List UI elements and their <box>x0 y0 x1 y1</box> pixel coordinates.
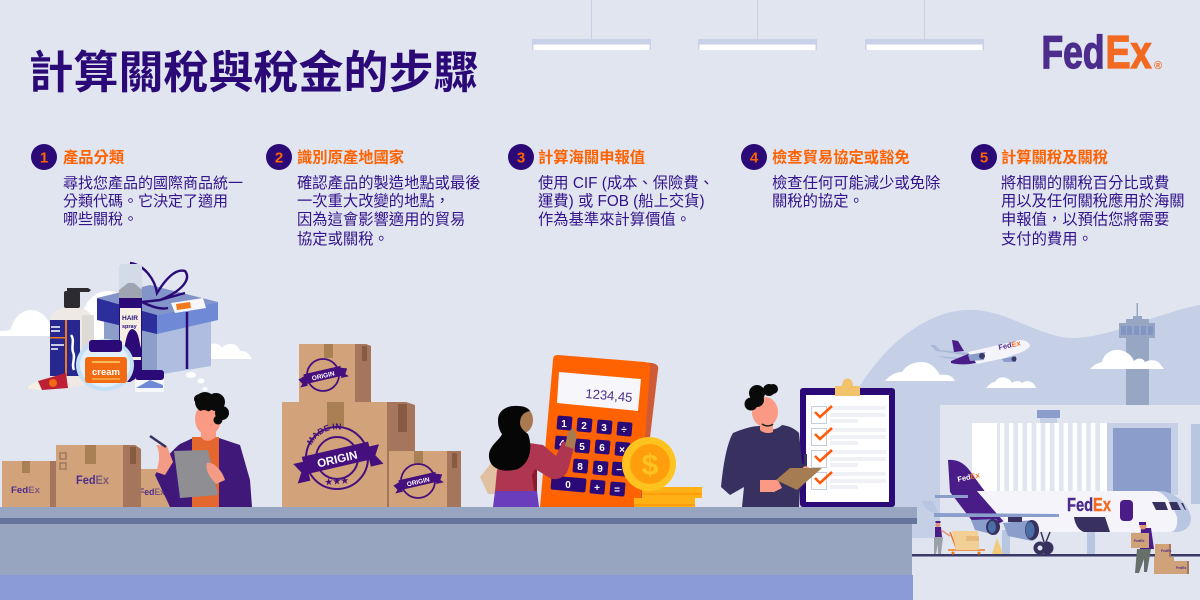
hair spray: HAIR <box>122 315 138 322</box>
hair spray <box>119 264 142 382</box>
step 1 <box>31 144 243 228</box>
small box: ORIGIN <box>406 476 431 488</box>
pump bottle <box>50 288 94 387</box>
wing pod <box>1008 517 1022 522</box>
step 1: 1 <box>40 150 48 166</box>
step 2: 2 <box>275 150 283 166</box>
step 2: 確認產品的製造地點或最後 <box>297 175 481 192</box>
stabiliser <box>922 501 938 513</box>
coins <box>622 437 702 509</box>
keys: 1 <box>561 419 567 430</box>
step 2: 識別原產地國家 <box>297 148 404 166</box>
coins: $ <box>642 449 659 482</box>
big box: ORIGIN <box>316 450 359 470</box>
step 3 <box>508 144 714 228</box>
FedEx logo <box>1042 26 1162 78</box>
keys: ÷ <box>621 425 627 436</box>
terminal windows <box>972 423 1200 504</box>
keys: 3 <box>601 423 607 434</box>
step 5: 5 <box>980 150 988 166</box>
support columns <box>1002 530 1095 554</box>
step 5: 用以及任何關稅應用於海關 <box>1001 192 1185 210</box>
gift box <box>97 263 218 375</box>
boxes with FedEx logos: FedEx <box>139 487 165 497</box>
big box: MADE IN <box>306 423 341 445</box>
step 3: 作為基準來計算價值。 <box>538 212 691 228</box>
logo on fuselage: FedEx <box>1067 494 1112 515</box>
cream jar <box>76 339 134 391</box>
step 5: 將相關的關稅百分比或費 <box>1001 175 1169 192</box>
courier with boxes: FedEx <box>1161 549 1172 553</box>
cargo plane <box>922 460 1191 554</box>
lower left band <box>912 538 942 555</box>
display <box>557 372 641 411</box>
step 1: 尋找您產品的國際商品統一 <box>63 175 243 192</box>
keys: 0 <box>565 480 571 491</box>
ground line <box>912 554 1200 556</box>
step 4: 檢查任何可能減少或免除 <box>772 175 940 192</box>
keys: 4 <box>559 439 565 450</box>
calculator <box>540 355 658 507</box>
origin boxes <box>282 344 461 507</box>
top box: ORIGIN <box>311 370 336 382</box>
terminal building <box>940 405 1200 555</box>
hills background <box>838 305 1200 540</box>
keys: 9 <box>597 464 603 475</box>
flying plane <box>930 338 1030 364</box>
thought bubbles <box>186 372 208 391</box>
calculator: 1234,45 <box>585 386 633 405</box>
keys: 2 <box>581 421 587 432</box>
step 2: 因為這會影響適用的貿易 <box>297 210 465 228</box>
thought cloud: products <box>0 263 252 392</box>
step 1: 產品分類 <box>63 148 125 166</box>
step 3: 3 <box>517 150 525 166</box>
hair spray: spray <box>122 324 138 330</box>
tail <box>948 460 1006 530</box>
step 4: 檢查貿易協定或豁免 <box>772 148 910 166</box>
boxes with FedEx logos: FedEx <box>76 475 110 487</box>
keys <box>550 415 633 497</box>
keys: 8 <box>577 462 583 473</box>
tube <box>28 373 68 390</box>
clouds <box>885 350 1164 388</box>
FedEx logo: ® <box>1154 60 1162 72</box>
counter <box>0 507 917 600</box>
keys: = <box>614 485 620 496</box>
step 5: 支付的費用。 <box>1001 231 1093 248</box>
cream jar: cream <box>92 367 120 378</box>
big box: ★★★ <box>324 476 349 487</box>
courier with boxes <box>1131 522 1189 574</box>
cargo plane: FedEx <box>957 470 981 484</box>
baggage worker <box>934 521 985 554</box>
step 4: 4 <box>750 150 759 166</box>
step 4 <box>741 144 940 210</box>
step 3: 使用 CIF (成本、保險費、 <box>538 175 714 192</box>
FedEx logo: Ex <box>1106 26 1152 78</box>
keys: × <box>619 445 625 456</box>
keys: − <box>616 465 622 476</box>
step 3: 計算海關申報值 <box>538 148 645 166</box>
courier with boxes: FedEx <box>1134 539 1145 543</box>
step 5 <box>971 144 1185 248</box>
step 2: 協定或關稅。 <box>297 231 389 248</box>
small jar <box>135 370 164 392</box>
FedEx logo: Fed <box>1042 26 1104 78</box>
person with tablet <box>150 392 252 507</box>
step 5: 計算關稅及關稅 <box>1001 148 1108 166</box>
courier with boxes: FedEx <box>1176 566 1187 570</box>
engines <box>971 519 999 535</box>
landing gear <box>1041 532 1050 542</box>
keys: 6 <box>599 443 605 454</box>
boxes with FedEx logos <box>2 445 181 507</box>
boxes with FedEx logos: FedEx <box>11 485 41 496</box>
top box <box>298 344 371 402</box>
woman at calculator <box>480 406 577 507</box>
title: 計算關稅與稅金的步驟 <box>28 47 479 98</box>
airport scene <box>838 303 1200 574</box>
step 1: 哪些關稅。 <box>63 211 138 228</box>
traffic cone <box>992 538 1003 554</box>
checklist clipboard <box>800 378 895 507</box>
ceiling lamps <box>532 0 984 50</box>
roof vent <box>1037 410 1060 423</box>
step 5: 申報值，以預估您將需要 <box>1001 212 1169 228</box>
control tower <box>1119 303 1155 406</box>
door and windows <box>1120 500 1133 521</box>
big box <box>282 402 415 507</box>
step 1: 分類代碼。它決定了適用 <box>63 192 228 210</box>
step 2 <box>266 144 481 248</box>
clouds behind products <box>0 291 252 359</box>
keys: + <box>594 483 600 494</box>
man with clipboard <box>721 384 822 507</box>
fuselage <box>977 491 1191 532</box>
flying plane: FedEx <box>998 338 1022 352</box>
keys: 5 <box>579 442 585 453</box>
step 4: 關稅的協定。 <box>772 193 864 210</box>
step 3: 運費) 或 FOB (船上交貨) <box>538 192 705 210</box>
small box <box>389 451 461 507</box>
step 2: 一次重大改變的地點， <box>297 193 450 210</box>
